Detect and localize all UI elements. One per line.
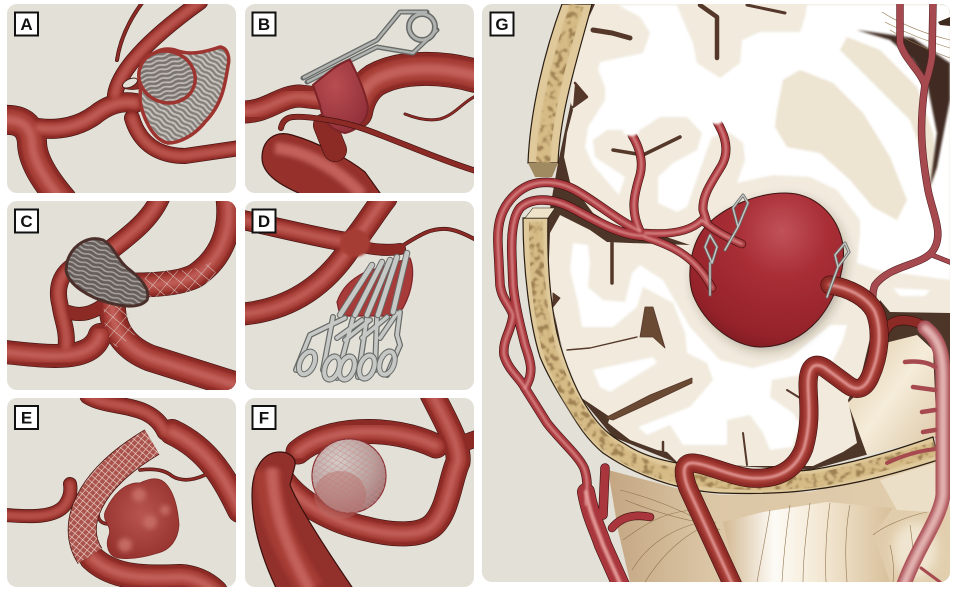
brainstem [723, 502, 893, 582]
stent meshes [103, 262, 216, 348]
thick feeding vessel [684, 285, 879, 592]
large left vessel [252, 452, 354, 590]
top right fine lines [882, 12, 950, 58]
label C: C [20, 212, 33, 231]
vessel junction [340, 229, 370, 257]
small clips [705, 195, 849, 297]
label C [15, 210, 38, 232]
mesh sphere [312, 439, 386, 519]
skull bone [523, 4, 938, 494]
tan cerebellum [608, 461, 950, 582]
panel E: flow diverter stent [5, 396, 240, 592]
bypass vessels [498, 122, 742, 592]
right dark sulcus [857, 30, 950, 187]
giant aneurysm [690, 193, 843, 347]
label F [252, 406, 276, 429]
temporal lobe tan [848, 335, 937, 455]
vessels [243, 69, 476, 150]
cream cortex [548, 4, 950, 466]
catheter [281, 117, 476, 171]
label B [252, 12, 276, 36]
vessel end fades [623, 114, 724, 136]
lower vessel [261, 133, 381, 193]
coil mass [66, 239, 148, 306]
panel B: clip and catheter [243, 4, 476, 200]
sulci [553, 5, 800, 465]
label A: A [20, 15, 33, 34]
light right cerebellum [893, 522, 937, 578]
brain cavity dark [548, 4, 950, 470]
clips [296, 253, 407, 382]
label B: B [258, 15, 270, 34]
vessels [281, 394, 478, 534]
vessels [5, 396, 240, 592]
right pink vessels [873, 2, 952, 590]
label E: E [21, 408, 32, 428]
label F: F [259, 408, 269, 428]
gap between branches [122, 78, 138, 88]
panel D: multiple clips [243, 198, 476, 390]
aneurysm shadow [693, 197, 846, 351]
lower right tan lobe [880, 462, 947, 513]
aneurysm [337, 258, 413, 316]
label A [15, 12, 38, 36]
label G: G [495, 15, 509, 34]
vessels [3, 2, 240, 200]
vessels [5, 198, 242, 387]
aneurysm with coils [131, 43, 229, 143]
clip [303, 12, 437, 82]
white matter [570, 5, 950, 450]
vessels [243, 198, 476, 314]
label G [490, 12, 514, 36]
fold lines [620, 490, 945, 582]
panel G: bypass in brain cross-section [482, 2, 952, 592]
craniotomy bevels [525, 163, 558, 218]
stented vessel segment [82, 442, 152, 556]
label D [252, 210, 276, 232]
label E [15, 406, 38, 429]
lobulated aneurysm [104, 479, 179, 559]
panel F: intrasaccular device [245, 394, 478, 590]
bone mottling [536, 5, 935, 483]
label D: D [258, 212, 270, 231]
panel C: stent-assisted coiling [5, 198, 242, 390]
cream deep nuclei and bands [775, 37, 937, 220]
aneurysm [313, 60, 368, 133]
panel A: coiled aneurysm [3, 2, 240, 200]
